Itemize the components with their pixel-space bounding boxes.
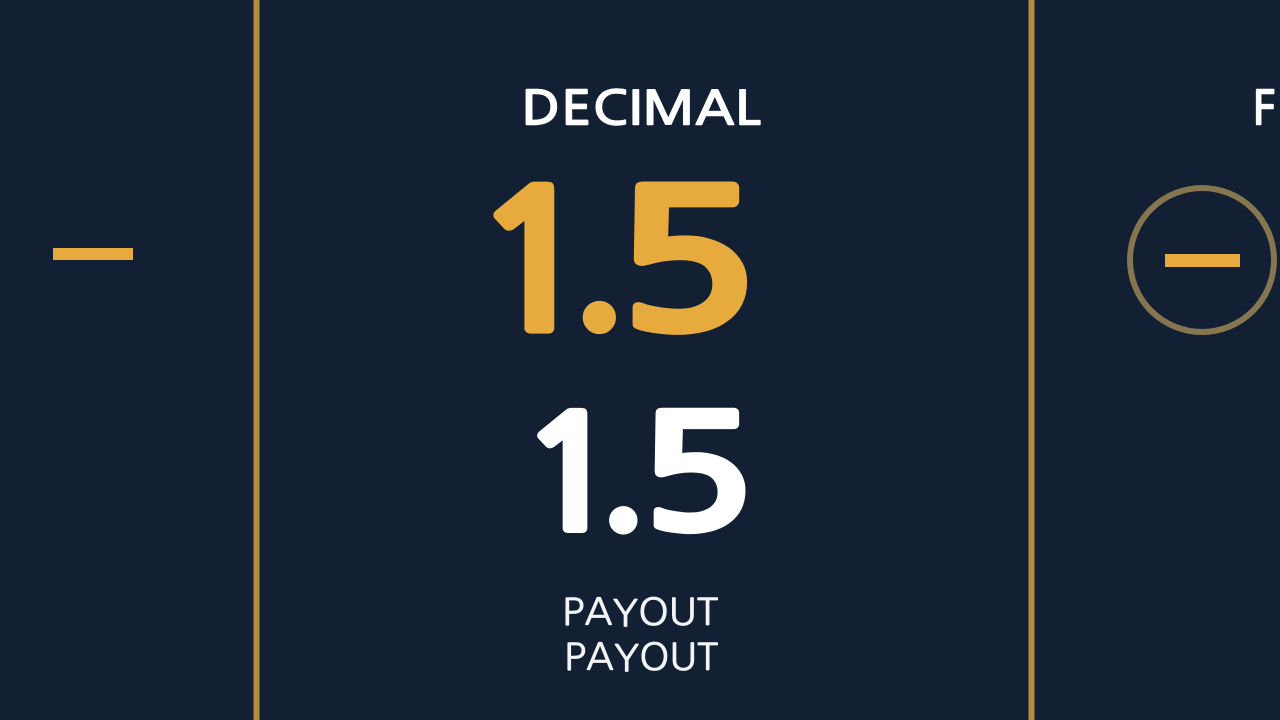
panel divider: left gold rule: [254, 0, 260, 720]
heading: DECIMAL: DECIMAL: [521, 86, 761, 133]
panel: decimal odds: [469, 86, 761, 676]
label: PAYOUT second line: PAYOUT: [564, 639, 718, 676]
icon: circled minus: [1130, 188, 1274, 332]
value: white 1.5: 5: [638, 397, 755, 554]
label: PAYOUT first line: PAYOUT: [562, 594, 718, 631]
value: gold 1.5: .: [565, 138, 631, 353]
panel divider: right gold rule: [1028, 0, 1034, 720]
value: white 1.5: 1: [517, 397, 625, 554]
panel: cropped right column: [1130, 86, 1276, 332]
heading: cropped letter F: F: [1252, 86, 1276, 133]
value: white 1.5: .: [594, 366, 650, 550]
value: gold 1.5: 1: [469, 169, 600, 359]
value: gold 1.5: 5: [613, 169, 759, 359]
icon: minus dash in left panel: [53, 248, 133, 260]
